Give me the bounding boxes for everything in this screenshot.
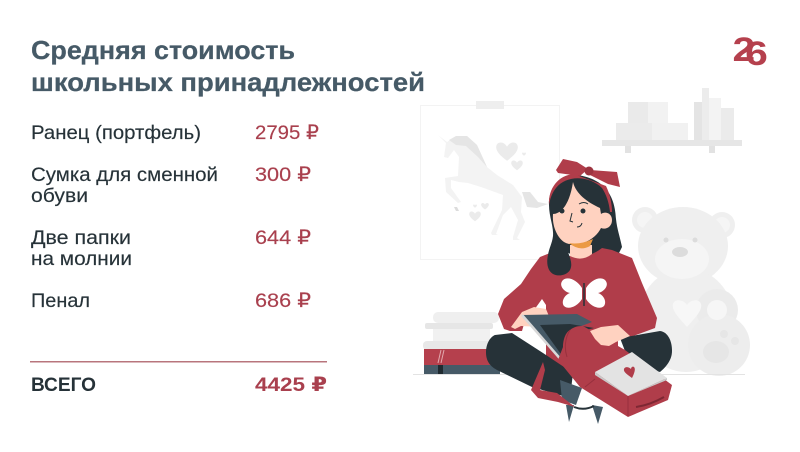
illustration background: poster with unicorn [420, 101, 560, 260]
row: Ранец [31, 122, 319, 144]
divider line [30, 361, 327, 362]
row: Пенал: Пенал [31, 290, 90, 312]
face [553, 182, 612, 244]
logo: 26: 26 [732, 30, 768, 72]
total row [31, 374, 327, 396]
title: Средняя стоимость [31, 35, 295, 65]
row: папки: 644 ₽ [255, 227, 311, 249]
heart on pocket [624, 367, 635, 378]
hair lock over sweater [547, 236, 571, 275]
row: папки [31, 227, 311, 270]
row: Сумка: обуви [31, 185, 88, 207]
title: школьных принадлежностей [31, 67, 425, 97]
backpack [522, 314, 672, 424]
row: Сумка [31, 164, 311, 207]
backpack body [558, 326, 672, 417]
girl [486, 159, 672, 398]
title [31, 35, 425, 97]
row: Пенал: 686 ₽ [255, 290, 311, 312]
buckle and spikes [560, 380, 582, 405]
inner board [522, 314, 592, 362]
row: Ранец: 2795 ₽ [255, 122, 319, 144]
right hand over backpack [590, 325, 630, 346]
row: Сумка: Сумка для сменной [31, 164, 218, 186]
neck [570, 245, 592, 259]
sweater [498, 248, 657, 377]
hair back [549, 175, 622, 255]
total row: 4425 ₽ [255, 374, 327, 396]
floor line [413, 374, 745, 376]
illustration background: shelf with boxes and books [602, 88, 742, 153]
row: Пенал [31, 290, 311, 312]
row: Сумка: 300 ₽ [255, 164, 311, 186]
butterfly print [561, 278, 607, 308]
illustration background: teddy bear [632, 207, 750, 376]
legs [486, 333, 573, 398]
row: папки: на молнии [31, 248, 132, 270]
stack of books [423, 312, 500, 374]
headband and bow [549, 159, 620, 212]
strap loop [531, 362, 575, 407]
left hand [511, 307, 551, 329]
front pocket [595, 352, 667, 396]
row: Ранец: Ранец (портфель) [31, 122, 201, 144]
row: папки: Две папки [31, 227, 131, 249]
total row: ВСЕГО [31, 374, 96, 396]
